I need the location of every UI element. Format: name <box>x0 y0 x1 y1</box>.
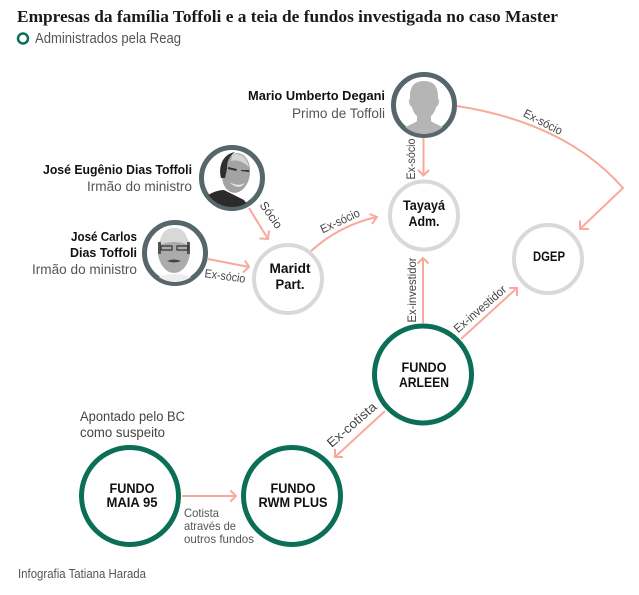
title: Empresas da família Toffoli e a teia de fundos investigada no caso Master <box>17 7 558 26</box>
node: DGEP <box>514 225 582 293</box>
arrow: José Eugênio to Maridt <box>249 199 286 239</box>
node: DGEP: DGEP <box>533 249 565 264</box>
node: Fundo Maia 95 <box>82 448 178 544</box>
node: Maridt Part.: Maridt <box>270 261 311 276</box>
arrow: Degani to Tayayá: Ex-sócio <box>404 138 418 180</box>
node: Maridt Part. <box>254 245 322 313</box>
arrow: Arleen to DGEP: Ex-investidor <box>451 282 509 336</box>
node: Fundo Arleen <box>374 326 472 423</box>
person: José Carlos Dias Toffoli: José Carlos <box>71 229 137 244</box>
arrow: José Carlos to Maridt <box>204 259 249 286</box>
person: José Eugênio Dias Toffoli: Irmão do ministro <box>87 179 192 194</box>
arrow: Degani to DGEP: Ex-sócio <box>521 106 565 138</box>
arrow: Degani to Tayayá <box>404 138 429 180</box>
arrow: José Carlos to Maridt: Ex-sócio <box>204 266 247 286</box>
node: Fundo Maia 95: FUNDO <box>110 481 154 496</box>
person: José Eugênio Dias Toffoli: José Eugênio Dias Toffoli <box>43 162 192 177</box>
person: José Eugênio Dias Toffoli <box>43 148 262 211</box>
node: Fundo Arleen: FUNDO <box>402 360 446 375</box>
person: José Carlos Dias Toffoli: Irmão do ministro <box>32 262 137 277</box>
node: Fundo RWM Plus <box>244 448 340 544</box>
arrow: Arleen to Tayayá <box>405 257 428 323</box>
arrow: José Eugênio to Maridt: Sócio <box>257 199 286 232</box>
node: Tayayá Adm.: Tayayá <box>403 198 445 213</box>
arrow: Maridt to Tayayá <box>311 206 377 251</box>
credit: Infografia Tatiana Harada <box>18 567 146 581</box>
legend: Administrados pela Reag <box>35 31 181 47</box>
person: Mario Umberto Degani: Mario Umberto Degani <box>248 88 385 103</box>
arrow: Maridt to Tayayá: Ex-sócio <box>318 206 362 236</box>
node: Fundo RWM Plus: FUNDO <box>270 481 316 496</box>
person: Mario Umberto Degani <box>248 74 454 139</box>
note: Apontado pelo BC: Apontado pelo BC <box>80 409 185 424</box>
note: Cotista através de outros fundos <box>184 506 254 546</box>
arrow: Maia 95 to RWM Plus <box>182 490 236 502</box>
note: Cotista através de outros fundos: Cotista <box>184 506 219 520</box>
note: Cotista através de outros fundos: outros fundos <box>184 532 254 546</box>
note: Apontado pelo BC <box>80 409 185 440</box>
node: Fundo Maia 95: MAIA 95 <box>106 495 158 510</box>
node: Tayayá Adm. <box>390 182 458 250</box>
node: Tayayá Adm.: Adm. <box>408 214 440 229</box>
arrow: Degani to DGEP <box>457 106 623 229</box>
node: Maridt Part.: Part. <box>276 277 304 292</box>
arrow: Arleen to RWM Plus: Ex-cotista <box>324 398 380 450</box>
node: Fundo Arleen: ARLEEN <box>399 375 449 390</box>
arrow: Arleen to Tayayá: Ex-investidor <box>405 257 419 322</box>
node: Fundo RWM Plus: RWM PLUS <box>258 495 328 510</box>
person: José Carlos Dias Toffoli: Dias Toffoli <box>70 245 137 260</box>
note: Apontado pelo BC: como suspeito <box>80 425 165 440</box>
note: Cotista através de outros fundos: através de <box>184 519 236 533</box>
person: José Carlos Dias Toffoli <box>32 222 206 284</box>
person: Mario Umberto Degani: Primo de Toffoli <box>292 106 385 121</box>
